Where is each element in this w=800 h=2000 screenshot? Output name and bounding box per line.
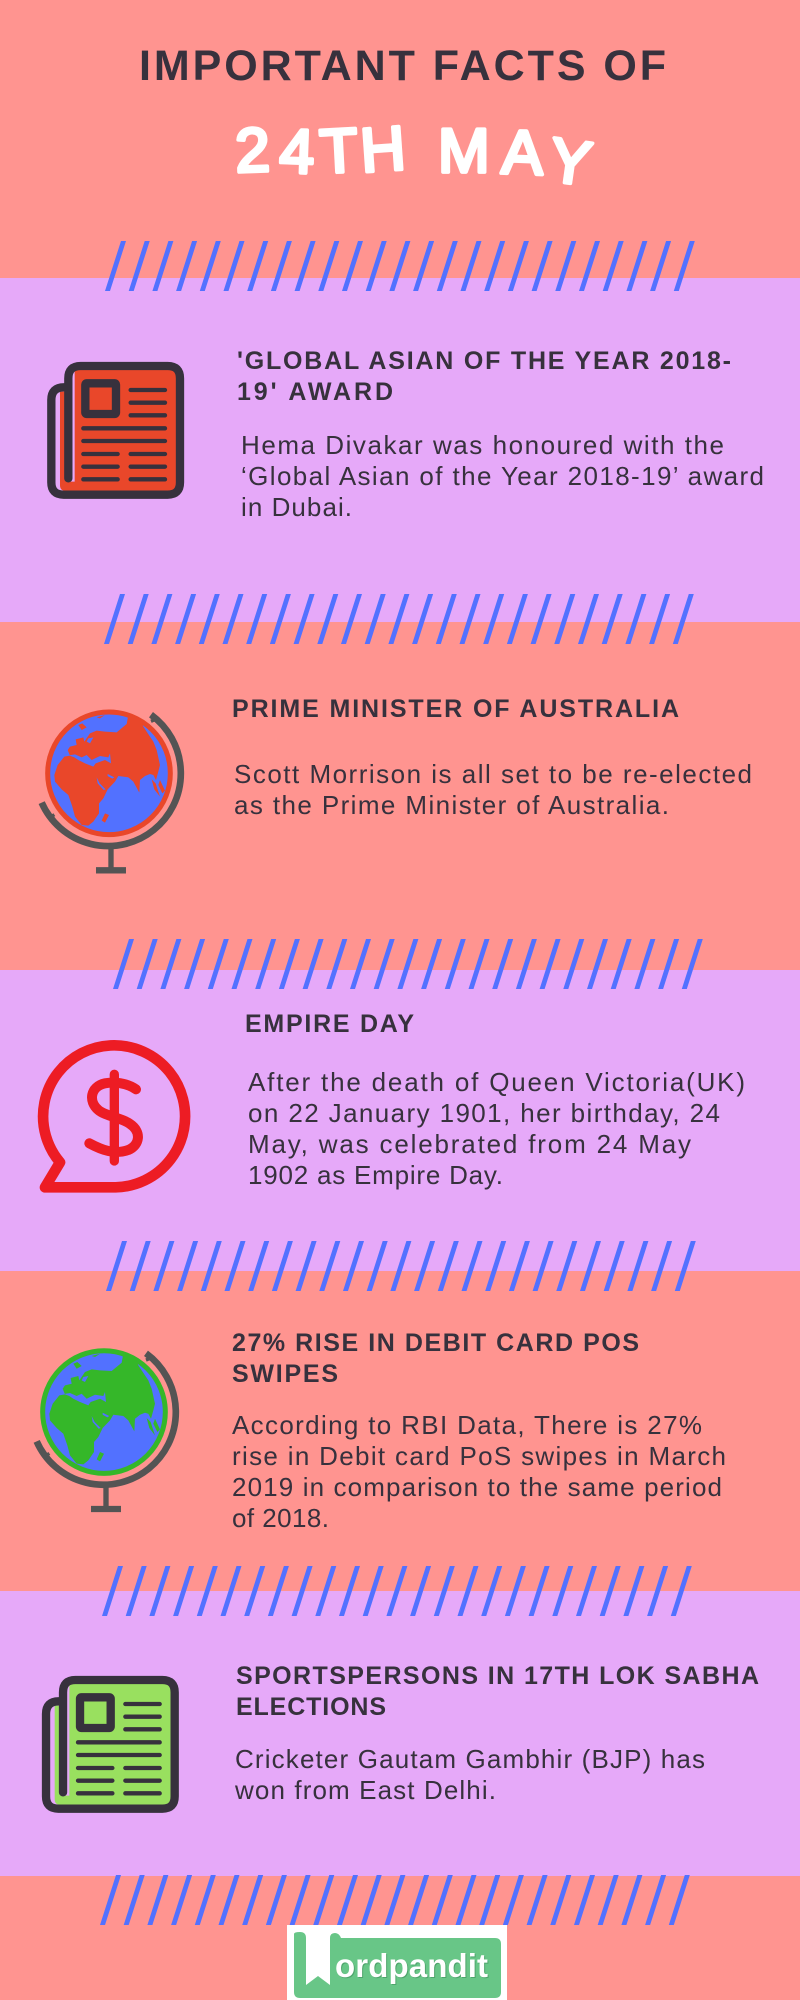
- heading: [237, 347, 731, 406]
- body text: Cricketer Gautam Gambhir (BJP) has: [235, 1744, 705, 1774]
- body text: According to RBI Data, There is 27%: [232, 1410, 702, 1440]
- heading: SPORTSPERSONS IN 17TH LOK SABHA: [236, 1662, 759, 1690]
- heading: EMPIRE DAY: [245, 1010, 414, 1038]
- body text: [241, 430, 764, 522]
- heading: [232, 1329, 639, 1388]
- heading: SWIPES: [232, 1360, 338, 1388]
- icon: newspaper red: [51, 366, 180, 495]
- panel: prime minister of australia: [0, 622, 800, 970]
- body text: of 2018.: [232, 1503, 329, 1533]
- body text: on 22 January 1901, her birthday, 24: [248, 1098, 720, 1128]
- body text: After the death of Queen Victoria(UK): [248, 1067, 745, 1097]
- icon: globe green: [37, 1351, 176, 1509]
- panel: header: [0, 0, 800, 278]
- body text: rise in Debit card PoS swipes in March: [232, 1441, 726, 1471]
- body text: 2019 in comparison to the same period: [232, 1472, 722, 1502]
- body text: [232, 1410, 726, 1533]
- body text: ‘Global Asian of the Year 2018-19’ award: [241, 461, 764, 491]
- body text: Hema Divakar was honoured with the: [241, 430, 724, 460]
- heading: 19' AWARD: [237, 378, 393, 406]
- icon: dollar speech bubble: [43, 1045, 185, 1187]
- body text: as the Prime Minister of Australia.: [234, 790, 669, 820]
- logo: wordpandit: [287, 1925, 507, 2000]
- panel: global asian of the year award: [0, 278, 800, 622]
- body text: Scott Morrison is all set to be re-elected: [234, 759, 752, 789]
- globe stand: [42, 715, 181, 870]
- panel: empire day: [0, 970, 800, 1271]
- logo badge: [294, 1932, 501, 1998]
- icon: globe orange: [42, 712, 181, 870]
- title: date: 24TH MAY: [234, 114, 596, 200]
- body text: [234, 759, 752, 820]
- body text: won from East Delhi.: [234, 1775, 496, 1805]
- heading: ELECTIONS: [236, 1693, 386, 1721]
- body text: in Dubai.: [241, 492, 352, 522]
- logo wordmark: ordpandit: [335, 1947, 488, 1984]
- body text: 1902 as Empire Day.: [248, 1160, 503, 1190]
- icon: newspaper green: [46, 1680, 175, 1809]
- body text: [248, 1067, 745, 1190]
- title: important facts of: IMPORTANT FACTS OF: [139, 42, 666, 90]
- panel: sportspersons in 17th lok sabha elections: [0, 1591, 800, 1876]
- heading: [236, 1662, 759, 1721]
- body text: [234, 1744, 705, 1805]
- heading: PRIME MINISTER OF AUSTRALIA: [232, 695, 679, 723]
- heading: 'GLOBAL ASIAN OF THE YEAR 2018-: [237, 347, 731, 375]
- heading: 27% RISE IN DEBIT CARD POS: [232, 1329, 639, 1357]
- body text: May, was celebrated from 24 May: [248, 1129, 691, 1159]
- panel: debit card pos swipes: [0, 1271, 800, 1591]
- globe stand: [37, 1353, 176, 1509]
